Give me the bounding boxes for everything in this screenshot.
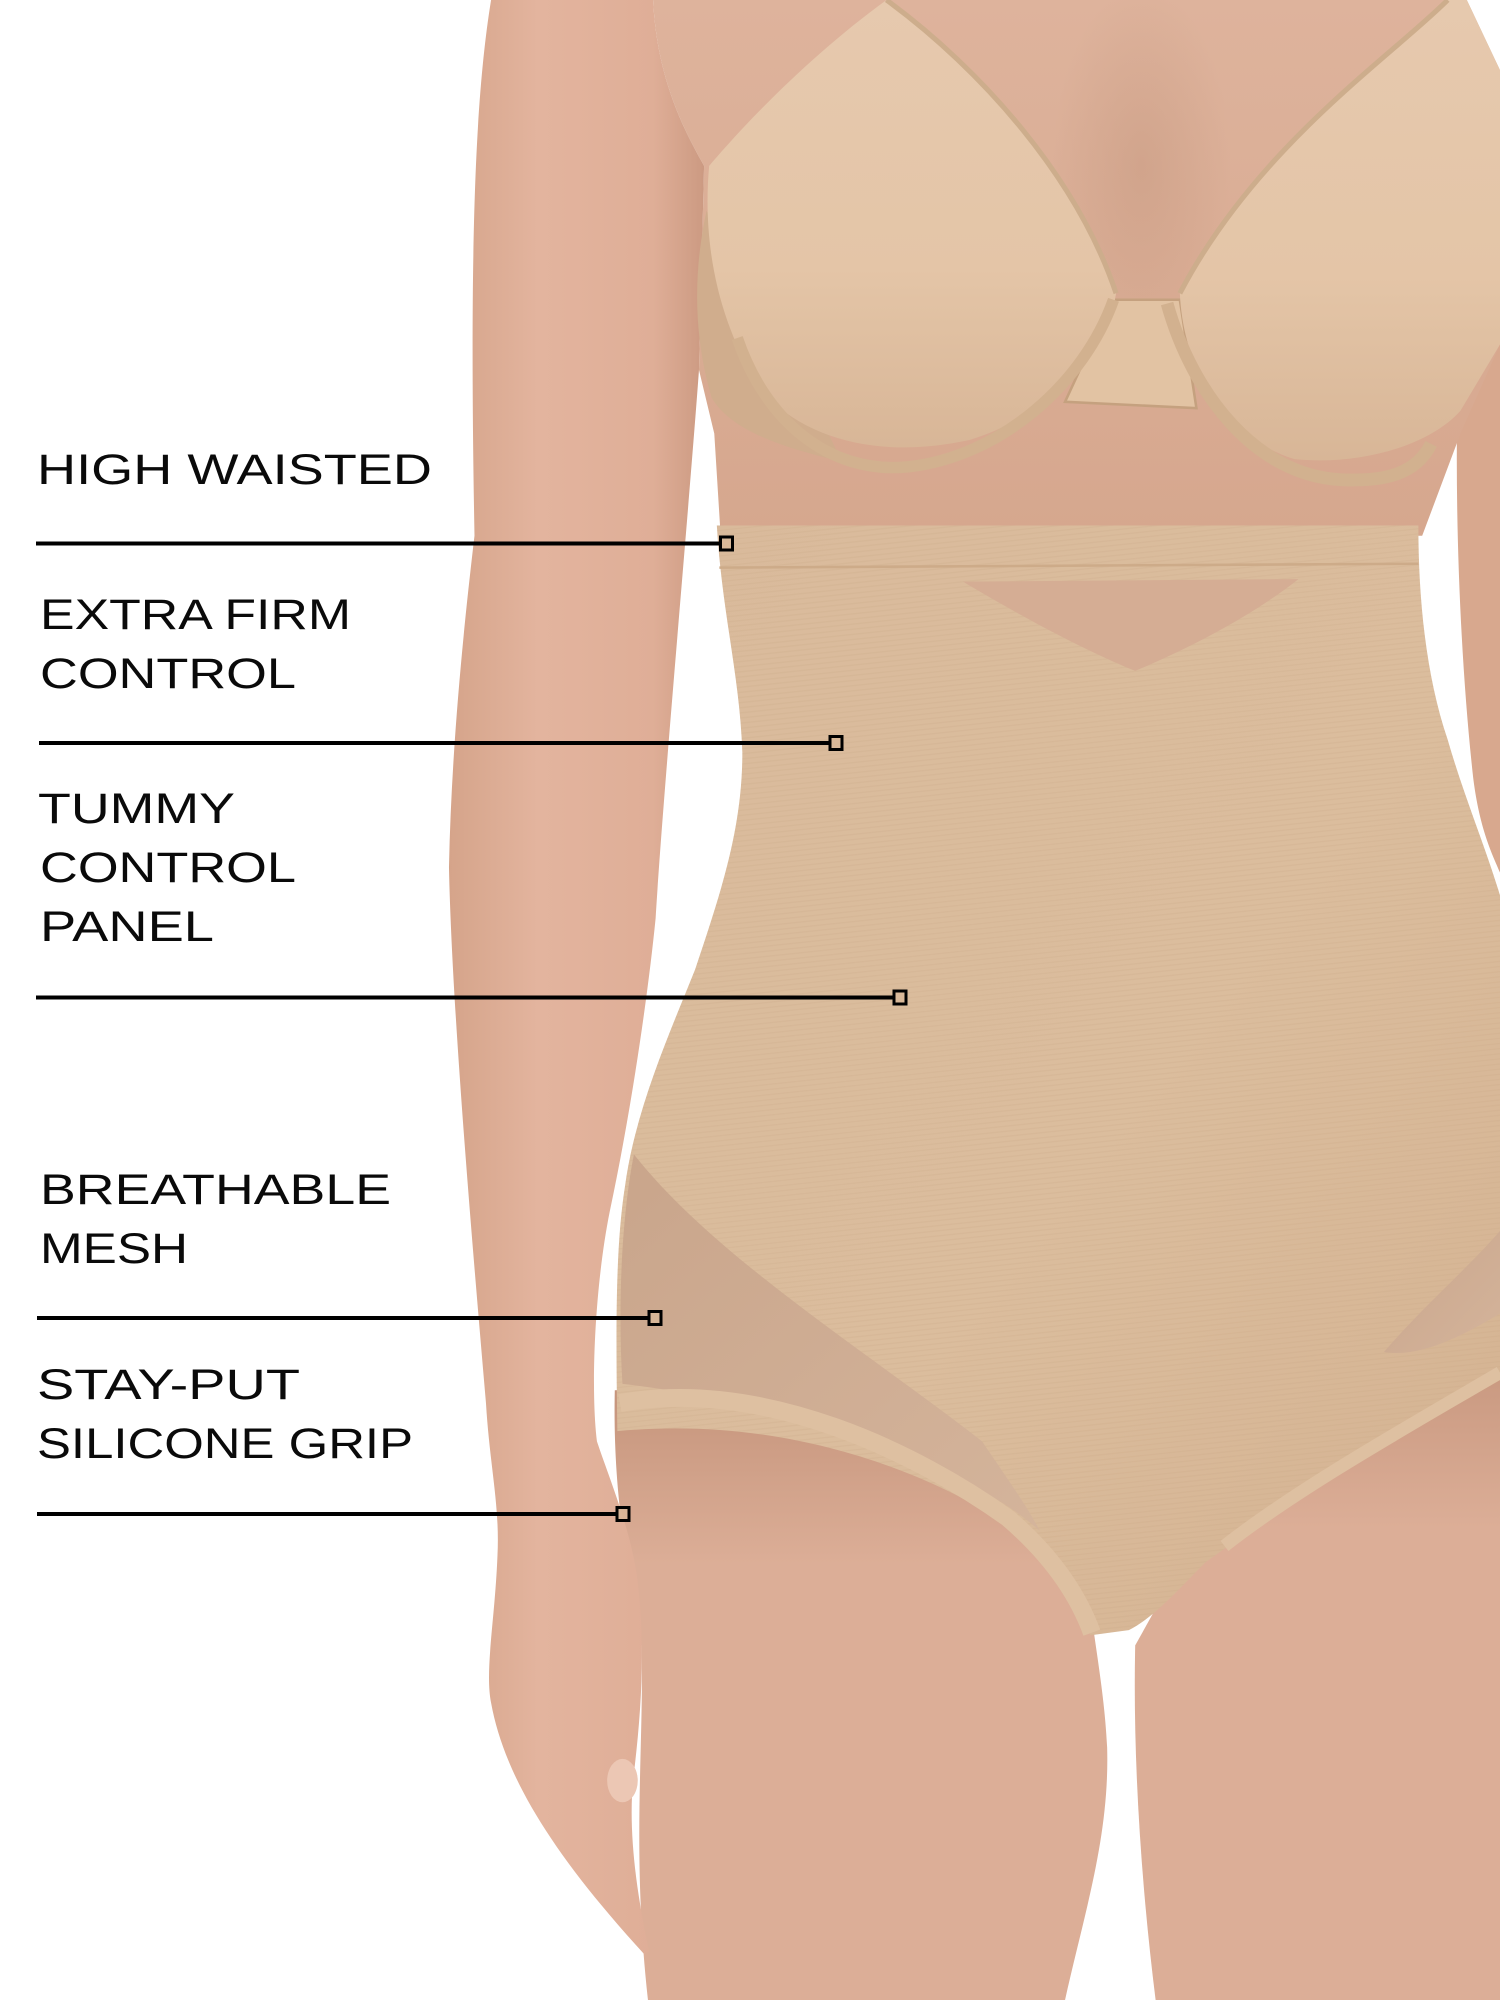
waistband seam — [719, 564, 1418, 568]
bra left cup — [708, 0, 1116, 447]
label: BREATHABLE — [40, 1166, 391, 1214]
bra right wire — [1167, 304, 1431, 480]
leader line — [36, 542, 721, 546]
callout: tummy control panel — [36, 785, 906, 1004]
marker — [617, 1508, 629, 1520]
near arm and hand — [449, 0, 704, 1954]
bra right cup — [1180, 0, 1500, 460]
leg binding right — [1224, 1372, 1500, 1546]
left mesh panel — [620, 1154, 1040, 1531]
marker — [649, 1312, 661, 1324]
callout: stay-put silicone grip — [37, 1361, 629, 1520]
callout: tummy control panel: PANEL — [40, 903, 214, 951]
brief body — [616, 526, 1500, 1635]
bra center gore — [1065, 300, 1196, 408]
callout: breathable mesh — [37, 1166, 661, 1324]
left leg — [615, 1378, 1107, 2000]
right mesh panel — [1384, 1231, 1500, 1353]
center shadow — [1052, 0, 1231, 344]
callout: high waisted — [36, 446, 732, 550]
right leg — [1135, 1327, 1500, 2000]
callout: tummy control panel: CONTROL — [40, 844, 296, 892]
bra left strap edge — [886, 0, 1116, 293]
callout: breathable mesh: MESH — [40, 1225, 188, 1273]
label: HIGH WAISTED — [37, 446, 432, 494]
label: TUMMY — [38, 785, 235, 833]
label: STAY-PUT — [37, 1361, 300, 1409]
leader line — [39, 741, 830, 745]
product figure — [449, 0, 1500, 2000]
marker — [830, 736, 842, 750]
upper torso — [653, 0, 1500, 536]
label: EXTRA FIRM — [40, 591, 351, 639]
marker — [894, 991, 906, 1004]
callout: extra firm control: CONTROL — [40, 650, 296, 698]
marker — [720, 537, 732, 550]
leader line — [36, 996, 894, 1000]
top mesh panel — [963, 579, 1298, 671]
callout: extra firm control — [39, 591, 842, 750]
bra side band — [697, 210, 842, 462]
fingertip — [607, 1759, 638, 1802]
leg binding left — [620, 1398, 1092, 1633]
bra right strap edge — [1180, 0, 1448, 293]
leader line — [37, 1316, 649, 1320]
leader line — [37, 1512, 617, 1516]
high waisted brief — [616, 526, 1500, 1635]
callout: stay-put silicone grip: SILICONE GRIP — [37, 1420, 413, 1468]
bra — [697, 0, 1500, 480]
knit texture — [616, 526, 1500, 1635]
bra left wire — [737, 300, 1114, 468]
far arm — [1457, 332, 1500, 872]
